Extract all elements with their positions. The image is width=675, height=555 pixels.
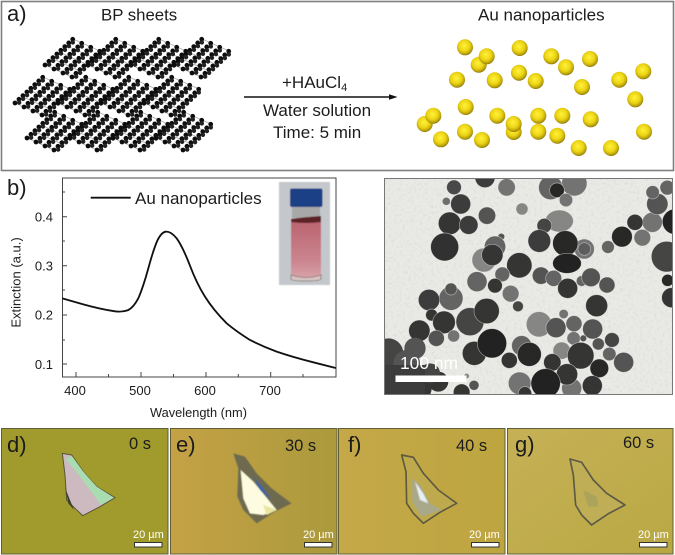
x-axis tick labels: 700 — [259, 383, 281, 398]
time 40 s: 40 s — [456, 437, 487, 455]
TEM scale bar — [396, 376, 466, 382]
x-axis tick labels: 500 — [129, 383, 151, 398]
reagent label: 4 — [341, 82, 347, 94]
x-axis title: Wavelength (nm) — [150, 405, 247, 420]
reagent label: +HAuCl — [282, 73, 341, 92]
flake e — [233, 453, 292, 523]
flake d — [62, 453, 115, 516]
panel c: TEM micrograph — [384, 178, 673, 395]
time 0 s: 0 s — [129, 435, 151, 453]
y-axis tick labels: 0.3 — [35, 258, 53, 274]
legend: Au nanoparticles — [135, 189, 262, 208]
scale d — [133, 529, 164, 547]
y-axis tick labels: 0.4 — [35, 210, 53, 224]
inset: vial photo — [279, 182, 330, 285]
condition: water solution: Water solution — [263, 101, 371, 120]
chart axes and ticks — [62, 178, 336, 377]
y-axis tick labels: 0.1 — [35, 357, 53, 372]
panel g: optical image 60 s — [508, 428, 673, 554]
TEM scale label: 100 nm — [400, 353, 458, 373]
scale f: 20 µm — [469, 529, 500, 541]
chart: extinction spectrum — [8, 178, 336, 420]
panel a: synthesis scheme — [2, 1, 674, 170]
heading: Au nanoparticles: Au nanoparticles — [478, 6, 605, 24]
x-axis tick labels: 600 — [194, 383, 216, 398]
flake g — [570, 459, 625, 525]
x-axis tick labels: 400 — [64, 383, 86, 398]
panel label b: b) — [7, 175, 27, 200]
panel e: optical image 30 s — [170, 428, 337, 554]
y-axis tick labels — [35, 210, 53, 372]
scale d: 20 µm — [133, 529, 164, 541]
x-axis tick labels — [64, 383, 281, 398]
condition: time: Time: 5 min — [273, 123, 361, 142]
flake f — [402, 455, 457, 523]
y-axis title: Extinction (a.u.) — [8, 237, 24, 328]
scale g — [638, 529, 669, 547]
label f: f) — [348, 432, 361, 457]
time 30 s: 30 s — [285, 437, 316, 455]
illustration: layered BP sheets — [15, 39, 231, 151]
scale g: 20 µm — [638, 529, 669, 541]
reaction arrow — [244, 94, 398, 100]
label g: g) — [515, 432, 535, 457]
illustration: gold nanoparticles — [417, 39, 652, 156]
panel d: optical image 0 s — [2, 428, 168, 554]
scale e: 20 µm — [303, 529, 334, 541]
scale f — [469, 529, 500, 547]
label e: e) — [176, 432, 196, 457]
spectrum curve — [62, 232, 336, 368]
panel f: optical image 40 s — [338, 428, 505, 554]
panel label a: a) — [7, 1, 27, 26]
heading: BP sheets: BP sheets — [101, 6, 177, 24]
TEM nanoparticles — [385, 179, 672, 394]
label d: d) — [7, 432, 27, 457]
y-axis tick labels: 0.2 — [35, 308, 53, 322]
time 60 s: 60 s — [623, 434, 654, 452]
scale e — [303, 529, 334, 547]
